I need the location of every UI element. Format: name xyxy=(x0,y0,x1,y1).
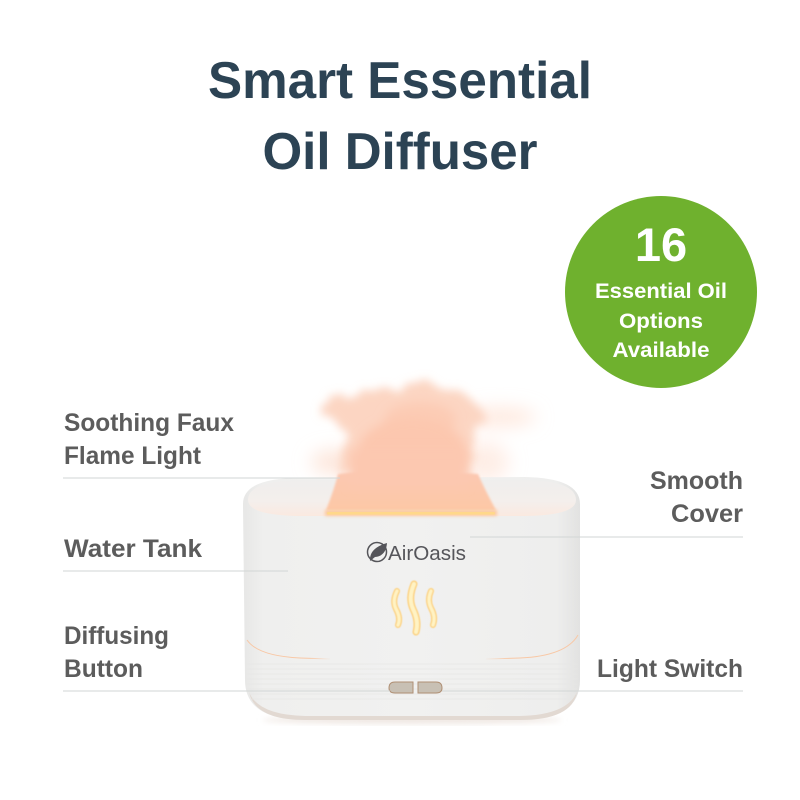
device body xyxy=(243,477,580,720)
badge: 16 essential oil options: 16 xyxy=(635,218,687,271)
callout: soothing faux flame light: Flame Light xyxy=(64,442,202,470)
device shadow xyxy=(262,716,562,724)
callout: diffusing button: Diffusing xyxy=(64,622,169,650)
mist cloud xyxy=(311,382,536,486)
base shading xyxy=(249,692,577,720)
flame light bar xyxy=(325,510,497,516)
diffuser product illustration xyxy=(243,382,580,724)
title: Oil Diffuser xyxy=(262,123,538,181)
title: Smart Essential xyxy=(208,52,592,110)
badge: 16 essential oil options: Essential Oil xyxy=(595,280,727,303)
callout: soothing faux flame light xyxy=(63,409,340,478)
callout: smooth cover: Smooth xyxy=(650,467,743,495)
badge: 16 essential oil options: Available xyxy=(612,339,710,362)
brand logo: AirOasis xyxy=(388,542,466,565)
title xyxy=(208,52,592,181)
top well xyxy=(248,480,576,516)
callout: light switch: Light Switch xyxy=(597,655,743,683)
flame plume xyxy=(326,471,496,510)
callout: smooth cover: Cover xyxy=(671,500,743,528)
badge: 16 essential oil options: Options xyxy=(619,310,703,333)
callout: diffusing button: Button xyxy=(64,655,143,683)
orange seam xyxy=(247,635,578,659)
callout: diffusing button xyxy=(63,622,390,691)
base ribbing xyxy=(246,664,578,699)
badge: 16 essential oil options xyxy=(565,196,757,388)
flame icon xyxy=(394,584,434,632)
callout: soothing faux flame light: Soothing Faux xyxy=(64,409,234,437)
callout: water tank: Water Tank xyxy=(64,535,202,563)
control buttons xyxy=(389,682,442,693)
callout: smooth cover xyxy=(470,467,743,537)
